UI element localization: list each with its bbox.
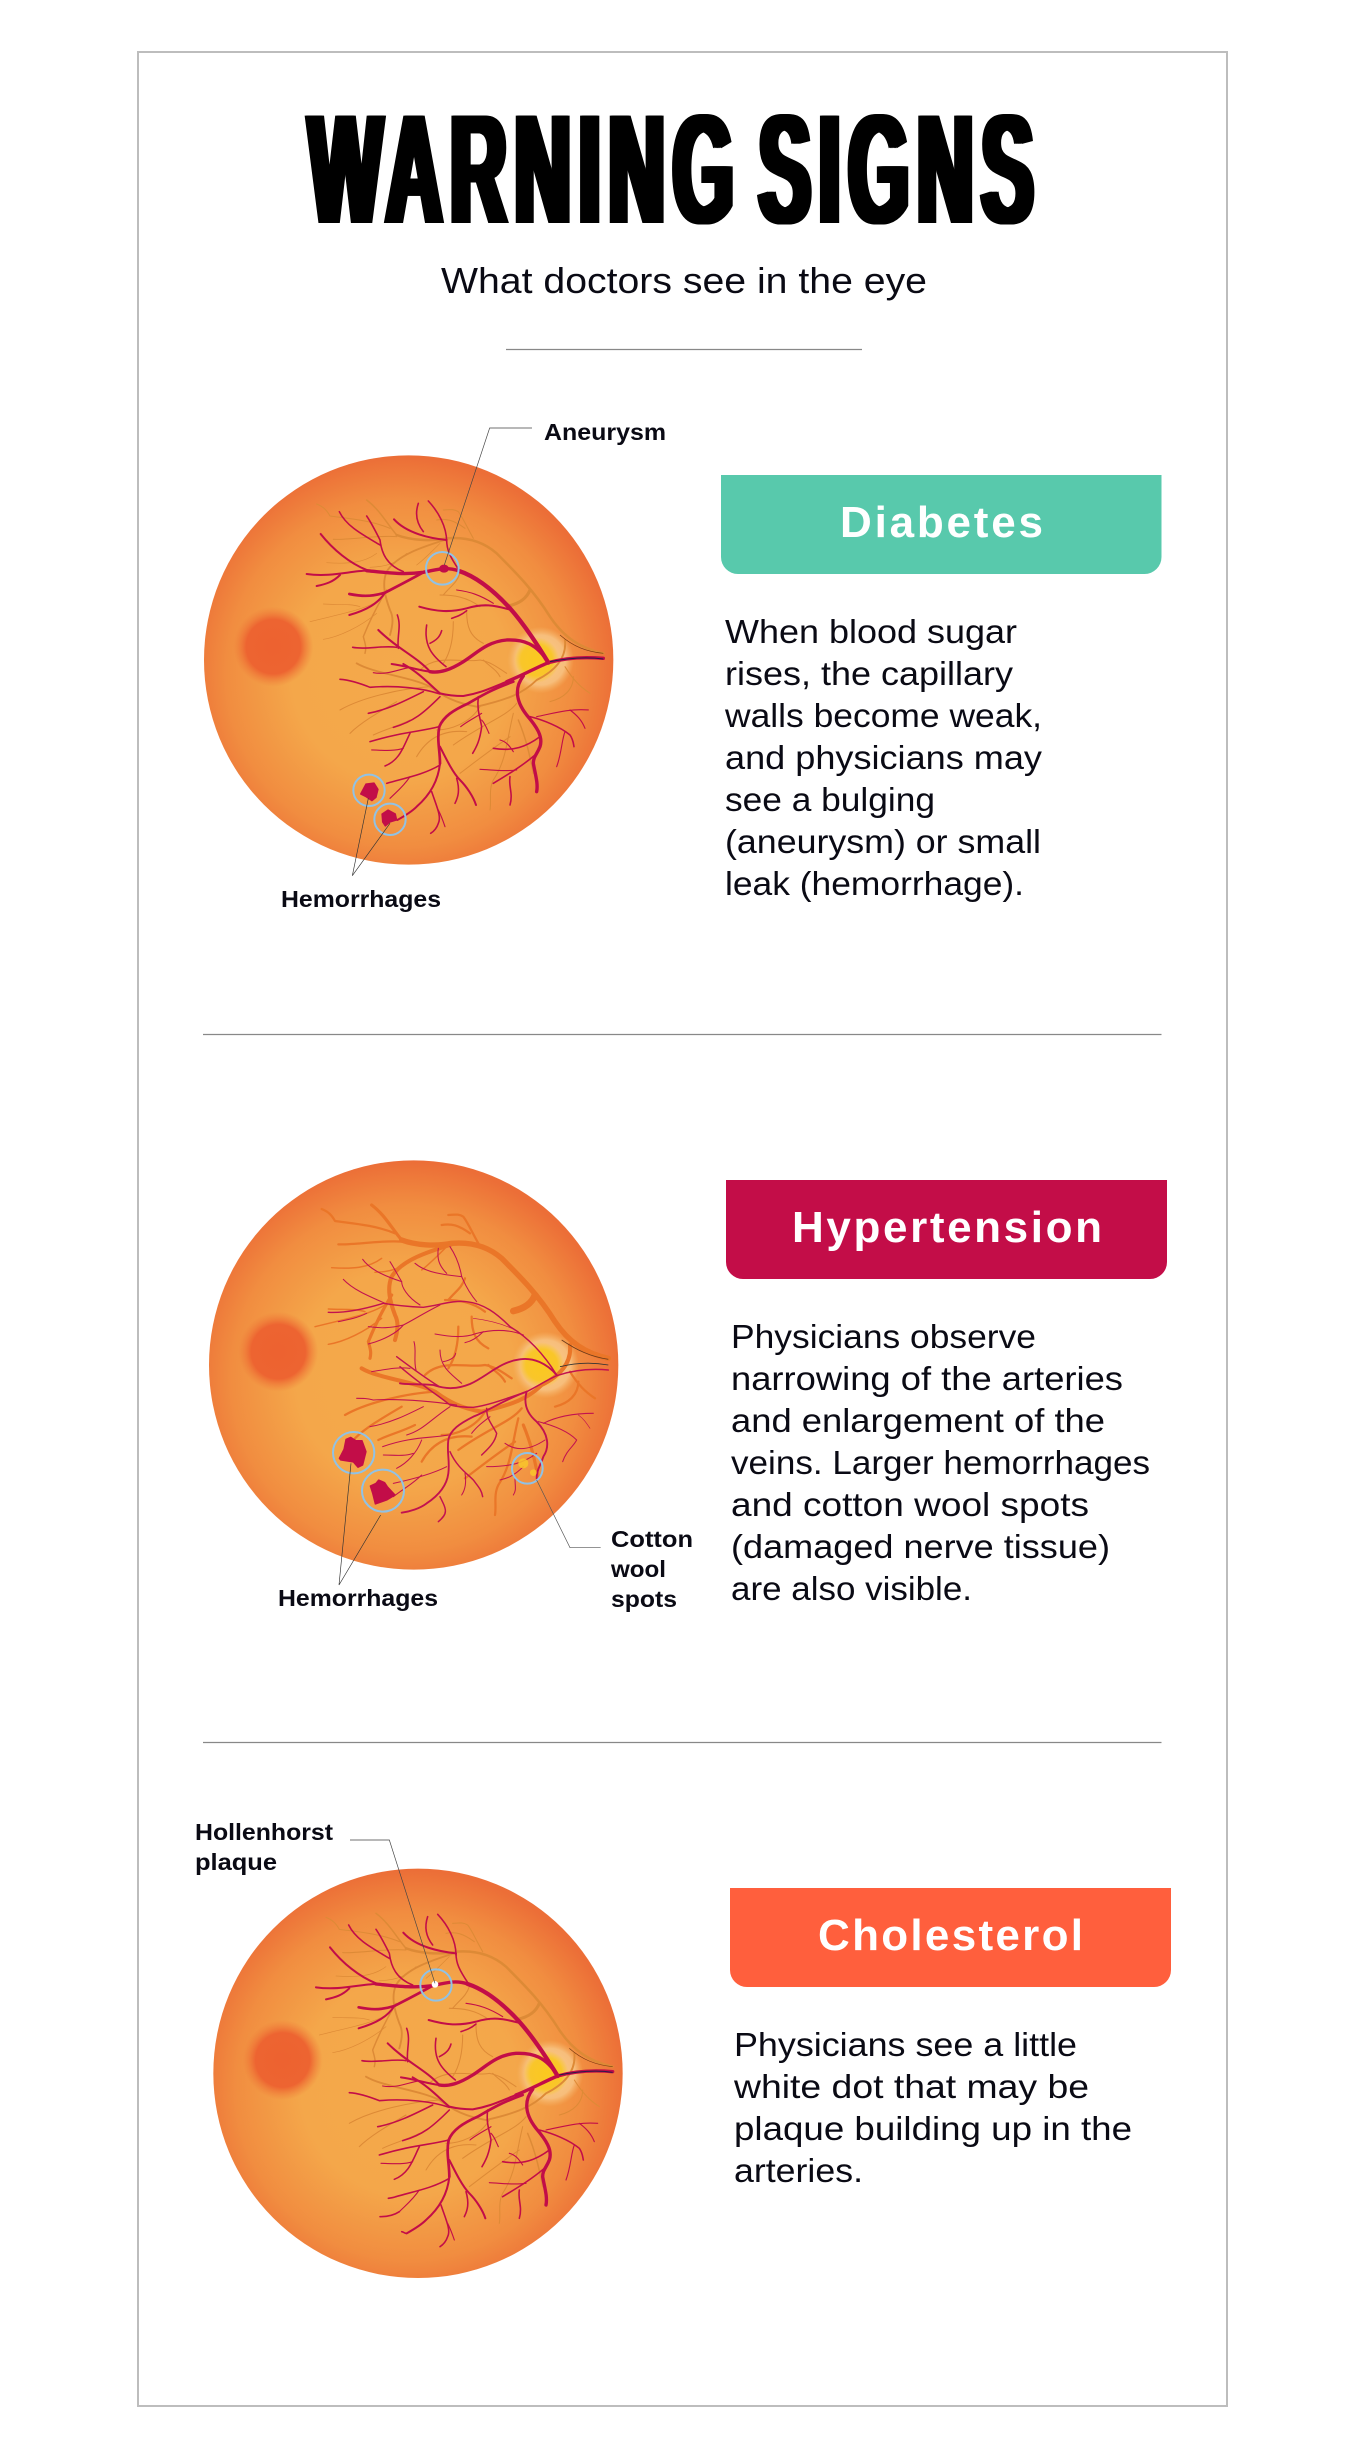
text: hypertension description: are also visible. — [731, 1570, 972, 1607]
text: diabetes description: When blood sugar — [725, 613, 1017, 650]
heading: cholesterol: Cholesterol — [818, 1911, 1083, 1960]
label: hemorrhages: Hemorrhages — [278, 1585, 438, 1611]
text: diabetes description — [724, 613, 1043, 902]
heading: diabetes — [721, 475, 1162, 574]
text: cholesterol description: arteries. — [734, 2152, 863, 2189]
label: cotton wool spots: wool — [610, 1556, 666, 1582]
text: diabetes description: rises, the capillary — [725, 655, 1014, 692]
heading: diabetes: Diabetes — [840, 498, 1043, 547]
text: hypertension description: veins. Larger hemorrhages — [731, 1444, 1150, 1481]
text: hypertension description: and cotton wool spots — [731, 1486, 1089, 1523]
label: aneurysm: Aneurysm — [544, 419, 666, 445]
text: cholesterol description: white dot that may be — [733, 2068, 1089, 2105]
text: cholesterol description: plaque building up in the — [734, 2110, 1132, 2147]
text: hypertension description: and enlargement of the — [731, 1402, 1105, 1439]
label: hollenhorst plaque: Hollenhorst — [195, 1819, 333, 1845]
text: diabetes description: see a bulging — [725, 781, 935, 818]
text: diabetes description: (aneurysm) or small — [725, 823, 1041, 860]
text: cholesterol description — [733, 2026, 1132, 2189]
text: hypertension description: narrowing of the arteries — [731, 1360, 1123, 1397]
panel: diabetes — [204, 419, 1161, 912]
heading: cholesterol — [730, 1888, 1171, 1987]
heading: hypertension — [726, 1180, 1167, 1279]
heading: hypertension: Hypertension — [792, 1203, 1102, 1252]
label: cotton wool spots: spots — [611, 1586, 677, 1612]
label: hollenhorst plaque: plaque — [195, 1849, 277, 1875]
illustration: retina with plaque — [213, 1840, 623, 2278]
title: WARNING SIGNS — [309, 83, 1041, 257]
text: cholesterol description: Physicians see a little — [734, 2026, 1077, 2063]
text: hypertension description: Physicians observe — [731, 1318, 1036, 1355]
label: hemorrhages: Hemorrhages — [281, 886, 441, 912]
text: diabetes description: and physicians may — [725, 739, 1043, 776]
subtitle: What doctors see in the eye — [441, 260, 927, 301]
text: diabetes description: walls become weak, — [724, 697, 1042, 734]
illustration: diabetic retina — [204, 428, 613, 876]
text: hypertension description — [731, 1318, 1150, 1607]
illustration: hypertensive retina — [209, 1160, 618, 1585]
panel: cholesterol — [195, 1819, 1171, 2278]
page frame — [138, 52, 1227, 2406]
text: hypertension description: (damaged nerve tissue) — [731, 1528, 1110, 1565]
label: cotton wool spots: Cotton — [611, 1526, 693, 1552]
label: cotton wool spots — [610, 1526, 693, 1612]
text: diabetes description: leak (hemorrhage). — [725, 865, 1024, 902]
panel: hypertension — [209, 1160, 1167, 1612]
label: hollenhorst plaque — [195, 1819, 333, 1875]
